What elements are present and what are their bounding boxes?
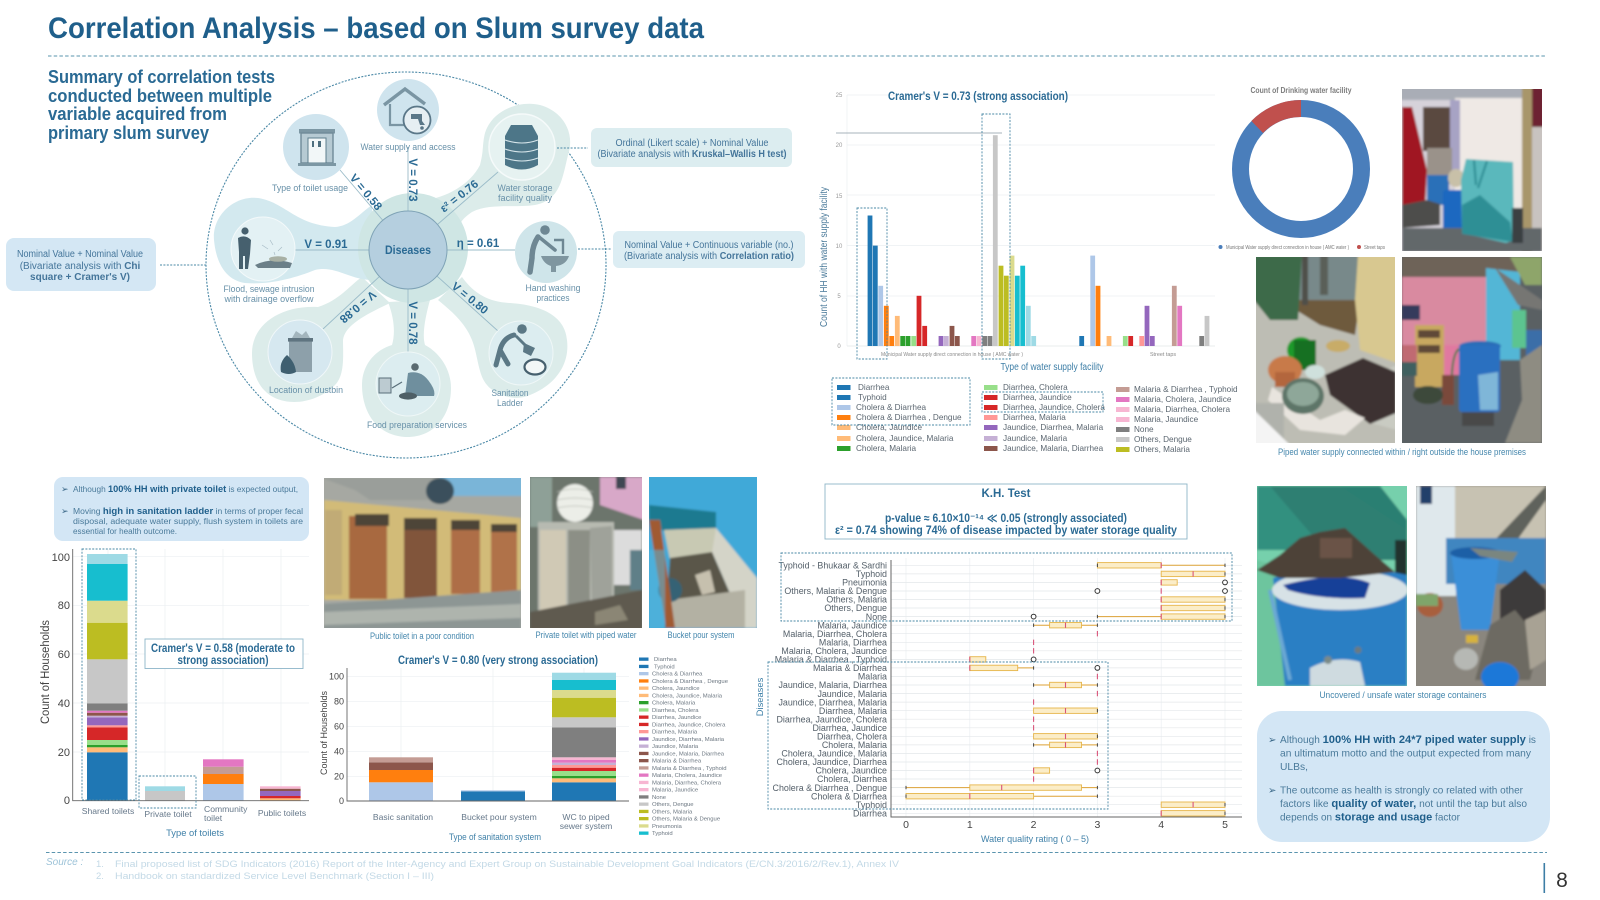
- annotation box: Cramer's V 0.58: Cramer's V = 0.58 (moderate to: [151, 643, 295, 655]
- node: type of toilet usage: [272, 114, 349, 193]
- photo: blue drum outside pink house: [1400, 255, 1544, 445]
- chart: water supply facility grouped bars: 5: [837, 294, 841, 300]
- chart: water supply facility grouped bars: [819, 91, 1215, 373]
- chart: type of toilets stacked bars: 80: [58, 600, 70, 612]
- callout: water supply findings: The outcome as health is strongly co related with other: [1280, 786, 1524, 796]
- callout: private toilet findings: ➢: [61, 485, 69, 495]
- photo: bucket pour system: [647, 475, 759, 630]
- legend: water supply chart: Malaria, Cholera, Jaundice: [1134, 395, 1232, 404]
- callout: private toilet findings: ➢: [61, 507, 69, 517]
- legend: sanitation chart: Malaria & Diarrhea , Typhoid: [652, 766, 727, 772]
- source notes: Handbook on standardized Service Level Benchmark (Section I – III): [115, 871, 434, 882]
- chart: water quality rating box plot: 5: [1222, 819, 1228, 831]
- caption: piped water supply: Piped water supply connected within / right outside the house premises: [1278, 447, 1526, 457]
- chart: water supply facility grouped bars: Municipal Water supply direct connection in house ( AMC water ): [881, 352, 1023, 358]
- legend: water supply chart: Cholera, Jaundice, Malaria: [856, 434, 954, 443]
- legend: sanitation chart: Jaundice, Malaria, Diarrhea: [652, 751, 725, 757]
- node: flood and sewage intrusion: with drainage overflow: [224, 294, 314, 304]
- category labels: Others, Malaria & Dengue: [784, 586, 887, 596]
- annotation box: Cramer's V 0.58: [145, 639, 303, 668]
- chart: water quality rating box plot: Water quality rating ( 0 – 5): [981, 833, 1089, 844]
- legend: sanitation chart: Cholera, Jaundice: [652, 686, 700, 692]
- chart: water supply facility grouped bars: Type of water supply facility: [1000, 362, 1104, 373]
- category labels: Cholera, Jaundice, Diarrhea: [776, 757, 887, 767]
- category labels: Cholera & Diarrhea , Dengue: [773, 783, 887, 793]
- callout: nominal + nominal: [6, 238, 206, 291]
- heading: summary of correlation tests: Summary of correlation tests: [48, 67, 275, 87]
- chart: sanitation system stacked bars: 40: [334, 746, 344, 756]
- legend: sanitation chart: [639, 657, 729, 837]
- legend: water supply chart: Diarrhea, Malaria: [1003, 413, 1066, 422]
- chart: sanitation system stacked bars: 60: [334, 722, 344, 732]
- callout: nominal + nominal: Nominal Value + Nominal Value: [17, 249, 143, 260]
- page number: [1544, 863, 1568, 893]
- chart: water quality rating box plot: 0: [903, 819, 909, 831]
- legend: water supply chart: Others, Dengue: [1134, 435, 1192, 444]
- annotation box: Cramer's V 0.58: strong association): [178, 655, 269, 667]
- chart: water quality rating box plot: 1: [967, 819, 973, 831]
- category labels: Diarrhea, Jaundice, Cholera: [776, 714, 887, 724]
- legend: water supply chart: Diarrhea, Jaundice, Cholera: [1003, 403, 1105, 412]
- legend: sanitation chart: Diarrhea: [654, 657, 677, 663]
- legend: water supply chart: [832, 378, 1238, 454]
- node: hand washing practices: Hand washing: [526, 283, 580, 293]
- chart: sanitation system stacked bars: sewer system: [560, 821, 612, 831]
- chart: sanitation system stacked bars: Type of sanitation system: [449, 831, 541, 842]
- legend: water supply chart: Malaria, Diarrhea, Cholera: [1134, 405, 1230, 414]
- chart: type of toilets stacked bars: 40: [58, 698, 70, 710]
- category labels: Cholera, Jaundice, Malaria: [781, 749, 887, 759]
- correlation labels: V = 0.58: [347, 172, 384, 213]
- legend: water supply chart: Diarrhea, Jaundice: [1003, 393, 1072, 402]
- node: sanitation ladder: Ladder: [497, 398, 523, 408]
- chart: type of toilets stacked bars: 20: [58, 747, 70, 759]
- node: food preparation services: [367, 352, 467, 430]
- chart: type of toilets stacked bars: toilet: [204, 813, 223, 823]
- callout: water supply findings: depends on storage and usage factor: [1280, 812, 1461, 824]
- source notes: [46, 857, 900, 882]
- legend: sanitation chart: Others, Malaria & Dengue: [652, 816, 721, 822]
- category labels: Malaria, Jaundice: [817, 620, 887, 630]
- K.H. test result box: ε² = 0.74 showing 74% of disease impacted by water storage quality: [835, 525, 1178, 537]
- category labels: Others, Dengue: [824, 603, 887, 613]
- category labels: Typhoid: [856, 800, 887, 810]
- captions: toilet photos: [370, 630, 734, 641]
- category labels: None: [866, 612, 887, 622]
- category labels: Diarrhea, Malaria: [819, 706, 887, 716]
- chart: sanitation system stacked bars: 80: [334, 696, 344, 706]
- whiskers: [906, 565, 1225, 796]
- callout: nominal + continuous: (Bivariate analysis with Correlation ratio): [624, 251, 794, 262]
- category labels: Malaria: [858, 672, 887, 682]
- chart: water supply facility grouped bars: 20: [836, 143, 843, 149]
- callout: private toilet findings: Moving high in sanitation ladder in terms of proper fecal: [73, 506, 303, 517]
- node: water storage facility quality: Water storage: [498, 183, 552, 193]
- legend: water supply chart: Jaundice, Malaria, Diarrhea: [1003, 444, 1104, 453]
- chart title: Cramer's V 0.80: Cramer's V = 0.80 (very strong association): [398, 655, 598, 667]
- legend: sanitation chart: Jaundice, Diarrhea, Malaria: [652, 737, 725, 743]
- category labels: Others, Malaria: [826, 595, 887, 605]
- chart: water supply facility grouped bars: Count of HH with water supply facility: [819, 187, 830, 327]
- callout: water supply findings: Although 100% HH with 24*7 piped water supply is: [1280, 734, 1536, 746]
- callout: private toilet findings: [54, 477, 309, 541]
- callout: nominal + continuous: [578, 231, 805, 268]
- callout: private toilet findings: essential for health outcome.: [73, 526, 177, 536]
- legend: sanitation chart: Diarrhea, Jaundice, Cholera: [652, 722, 726, 728]
- chart: type of toilets stacked bars: 100: [52, 552, 70, 564]
- chart: sanitation system stacked bars: 0: [339, 796, 344, 806]
- node: water supply and access: Water supply and access: [360, 142, 456, 152]
- center node: diseases: [369, 211, 447, 289]
- legend: sanitation chart: Others, Malaria: [652, 809, 693, 815]
- node: hand washing practices: practices: [536, 293, 570, 303]
- correlation labels: V = 0.73: [406, 158, 418, 202]
- legend: water supply chart: Diarrhea, Cholera: [1003, 383, 1068, 392]
- legend: sanitation chart: Malaria, Diarrhea, Cholera: [652, 780, 722, 786]
- legend: sanitation chart: Cholera & Diarrhea: [652, 672, 703, 678]
- callout: water supply findings: ULBs,: [1280, 762, 1308, 773]
- node: food preparation services: Food preparation services: [367, 420, 467, 430]
- category labels: Diarrhea, Cholera: [817, 732, 887, 742]
- legend: sanitation chart: Pneumonia: [652, 824, 683, 830]
- chart: water quality rating box plot: 4: [1158, 819, 1164, 831]
- category labels: Typhoid - Bhukaar & Sardhi: [778, 560, 887, 570]
- correlation labels: η = 0.61: [457, 238, 500, 250]
- chart: type of toilets stacked bars: Community: [204, 804, 248, 814]
- legend: water supply chart: Jaundice, Malaria: [1003, 434, 1068, 443]
- medians: [970, 563, 1193, 816]
- chart: sanitation system stacked bars: 100: [329, 672, 344, 682]
- chart: water quality rating box plot: 2: [1031, 819, 1037, 831]
- callout: ordinal + nominal: Ordinal (Likert scale) + Nominal Value: [616, 138, 769, 149]
- callout: ordinal + nominal: [557, 128, 792, 167]
- category labels: Pneumonia: [842, 578, 887, 588]
- category labels: Malaria, Diarrhea: [819, 638, 887, 648]
- chart title: Cramer's V 0.73: Cramer's V = 0.73 (strong association): [888, 91, 1068, 103]
- node: hand washing practices: [515, 221, 580, 303]
- legend: sanitation chart: Cholera, Jaundice, Malaria: [652, 693, 723, 699]
- legend: water supply chart: Jaundice, Diarrhea, Malaria: [1003, 423, 1104, 432]
- correlation labels: ε² = 0.76: [438, 178, 481, 215]
- captions: toilet photos: Private toilet with piped water: [536, 630, 636, 640]
- source notes: Final proposed list of SDG Indicators (2016) Report of the Inter-Agency and Expert Group on Sustainable Development Goal Indicators (E/CN.3/2016/2/Rev.1), Annex IV: [115, 859, 900, 870]
- node: flood and sewage intrusion: Flood, sewage intrusion: [224, 284, 314, 294]
- whisker caps: [906, 564, 1225, 815]
- chart: type of toilets stacked bars: Type of toilets: [166, 827, 224, 838]
- node: flood and sewage intrusion: [224, 217, 314, 304]
- photo: buckets on floor: [1254, 255, 1397, 447]
- legend: water supply chart: None: [1134, 425, 1154, 434]
- source notes: 2.: [96, 871, 104, 882]
- category labels: Diarrhea, Jaundice: [812, 723, 887, 733]
- photo: blue barrel covered with stones: [1255, 484, 1409, 688]
- chart: type of toilets stacked bars: 0: [64, 795, 70, 807]
- legend: sanitation chart: Diarrhea, Jaundice: [652, 715, 702, 721]
- chart: type of toilets stacked bars: Shared toilets: [82, 806, 134, 816]
- chart: water quality rating box plot: [754, 553, 1242, 844]
- heading: summary of correlation tests: [48, 67, 275, 143]
- legend: sanitation chart: Jaundice, Malaria: [652, 744, 699, 750]
- captions: toilet photos: Public toilet in a poor condition: [370, 631, 474, 641]
- category labels: [773, 560, 887, 818]
- callout: water supply findings: an ultimatum motto and the output expected from many: [1280, 748, 1532, 760]
- category labels: Malaria, Cholera, Jaundice: [781, 646, 887, 656]
- node: water storage facility quality: facility quality: [498, 193, 552, 203]
- photo: public toilets in poor condition: [322, 476, 523, 630]
- chart: drinking water donut: [1218, 86, 1385, 251]
- title: Correlation Analysis – based on Slum survey data: [48, 12, 704, 45]
- legend: sanitation chart: Diarrhea, Malaria: [652, 730, 698, 736]
- callout: private toilet findings: Although 100% HH with private toilet is expected output,: [73, 484, 298, 495]
- correlation labels: V = 0.80: [449, 281, 490, 317]
- node: water storage facility quality: [489, 114, 555, 203]
- callout: nominal + continuous: Nominal Value + Continuous variable (no.): [624, 240, 794, 251]
- legend: sanitation chart: Typhoid: [654, 664, 675, 670]
- source notes: 1.: [96, 859, 104, 870]
- node: sanitation ladder: Sanitation: [492, 388, 528, 398]
- callout: water supply findings: factors like quality of water, not until the tap but also: [1280, 798, 1527, 810]
- correlation labels: V = 0.91: [304, 239, 348, 251]
- chart: sanitation system stacked bars: WC to piped: [562, 812, 610, 822]
- node: sanitation ladder: [489, 321, 553, 408]
- callout: private toilet findings: disposal, adequate water supply, flush system in toilets are: [73, 516, 303, 526]
- legend: sanitation chart: Cholera & Diarrhea , Dengue: [652, 679, 729, 685]
- chart: water supply facility grouped bars: Street taps: [1150, 352, 1176, 358]
- node: water supply and access: [360, 79, 456, 152]
- callout: water supply findings: [1257, 711, 1550, 842]
- chart: water quality rating box plot: Diseases: [754, 677, 765, 716]
- page number: 8: [1556, 869, 1568, 892]
- chart: water supply facility grouped bars: 0: [837, 344, 841, 350]
- legend: water supply chart: Cholera, Jaundice: [856, 423, 922, 432]
- legend: sanitation chart: Others, Dengue: [652, 802, 694, 808]
- legend: water supply chart: Others, Malaria: [1134, 445, 1190, 454]
- correlation labels: V = 0.78: [406, 301, 418, 345]
- chart: type of toilets stacked bars: Public toilets: [258, 808, 306, 818]
- node: type of toilet usage: Type of toilet usage: [272, 183, 348, 193]
- center node: diseases: Diseases: [385, 243, 431, 257]
- legend: sanitation chart: Malaria, Cholera, Jaundice: [652, 773, 723, 779]
- legend: sanitation chart: Malaria, Jaundice: [652, 788, 699, 794]
- node: location of dustbin: [268, 320, 343, 395]
- category labels: Cholera, Malaria: [822, 740, 887, 750]
- captions: toilet photos: Bucket pour system: [668, 630, 734, 640]
- chart: water supply facility grouped bars: 10: [836, 244, 843, 250]
- category labels: Jaundice, Diarrhea, Malaria: [778, 697, 887, 707]
- diagram: correlation network around diseases: [206, 72, 606, 458]
- legend: water supply chart: Cholera & Diarrhea , Dengue: [856, 413, 962, 422]
- legend: water supply chart: Diarrhea: [858, 383, 890, 392]
- legend: sanitation chart: Malaria & Diarrhea: [652, 758, 702, 764]
- chart: drinking water donut: Count of Drinking water facility: [1250, 86, 1352, 95]
- photo: teal barrel beside wall: [1400, 87, 1544, 253]
- source notes: Source :: [46, 857, 83, 868]
- category labels: Typhoid: [856, 569, 887, 579]
- K.H. test result box: [825, 484, 1187, 539]
- caption: uncovered storage: Uncovered / unsafe water storage containers: [1320, 690, 1487, 700]
- chart: type of toilets stacked bars: [40, 549, 309, 838]
- chart: water supply facility grouped bars: 25: [836, 93, 843, 99]
- heading: summary of correlation tests: variable acquired from: [48, 104, 227, 124]
- chart: type of toilets stacked bars: Private toilet: [144, 809, 192, 819]
- callout: nominal + nominal: square + Cramer's V): [30, 272, 130, 283]
- callout: water supply findings: ➢: [1268, 786, 1276, 796]
- heading: summary of correlation tests: conducted between multiple: [48, 86, 272, 106]
- chart: type of toilets stacked bars: 60: [58, 649, 70, 661]
- legend: sanitation chart: Typhoid: [652, 831, 673, 837]
- photo: private toilet with piped water: [528, 475, 644, 630]
- category labels: Malaria & Diarrhea , Typhoid: [775, 655, 887, 665]
- photo: uncovered blue drum on debris: [1414, 484, 1548, 692]
- chart: drinking water donut: Municipal Water supply direct connection in house ( AMC water ): [1226, 245, 1349, 251]
- callout: water supply findings: ➢: [1268, 735, 1276, 746]
- category labels: Cholera, Jaundice: [815, 766, 887, 776]
- callout: ordinal + nominal: (Bivariate analysis with Kruskal–Wallis H test): [598, 149, 786, 160]
- correlation labels: V = 0.88: [337, 288, 378, 325]
- K.H. test result box: p-value ≈ 6.10×10⁻¹⁴ ≪ 0.05 (strongly associated): [885, 513, 1127, 525]
- correlation labels: [304, 158, 500, 345]
- legend: water supply chart: Cholera, Malaria: [856, 444, 917, 453]
- category labels: Diarrhea: [853, 808, 887, 818]
- K.H. test result box: K.H. Test: [982, 488, 1031, 500]
- legend: sanitation chart: None: [652, 795, 667, 801]
- chart: sanitation system stacked bars: Count of Households: [319, 691, 330, 775]
- chart: water quality rating box plot: 3: [1094, 819, 1100, 831]
- legend: water supply chart: Typhoid: [858, 393, 887, 402]
- category labels: Malaria & Diarrhea: [813, 663, 887, 673]
- legend: water supply chart: Cholera & Diarrhea: [856, 403, 927, 412]
- chart: sanitation system stacked bars: 20: [334, 772, 344, 782]
- category labels: Jaundice, Malaria: [817, 689, 887, 699]
- legend: sanitation chart: Diarrhea, Cholera: [652, 708, 699, 714]
- chart: type of toilets stacked bars: Count of Households: [40, 620, 52, 724]
- heading: summary of correlation tests: primary slum survey: [48, 123, 209, 143]
- legend: water supply chart: Malaria, Jaundice: [1134, 415, 1199, 424]
- chart: sanitation system stacked bars: Basic sanitation: [373, 812, 433, 822]
- boxes: [906, 563, 1225, 816]
- chart: sanitation system stacked bars: Bucket pour system: [461, 812, 537, 822]
- category labels: Malaria, Diarrhea, Cholera: [783, 629, 887, 639]
- node: location of dustbin: Location of dustbin: [269, 385, 343, 395]
- chart: sanitation system stacked bars: [319, 655, 629, 842]
- legend: water supply chart: Malaria & Diarrhea , Typhoid: [1134, 385, 1238, 394]
- callout: nominal + nominal: (Bivariate analysis with Chi: [20, 261, 141, 272]
- category labels: Cholera, Diarrhea: [817, 774, 887, 784]
- outliers: [1031, 580, 1227, 773]
- chart: water supply facility grouped bars: 15: [836, 194, 843, 200]
- chart: drinking water donut: Street taps: [1364, 245, 1385, 251]
- category labels: Cholera & Diarrhea: [811, 791, 887, 801]
- legend: sanitation chart: Cholera, Malaria: [652, 700, 696, 706]
- category labels: Jaundice, Malaria, Diarrhea: [778, 680, 887, 690]
